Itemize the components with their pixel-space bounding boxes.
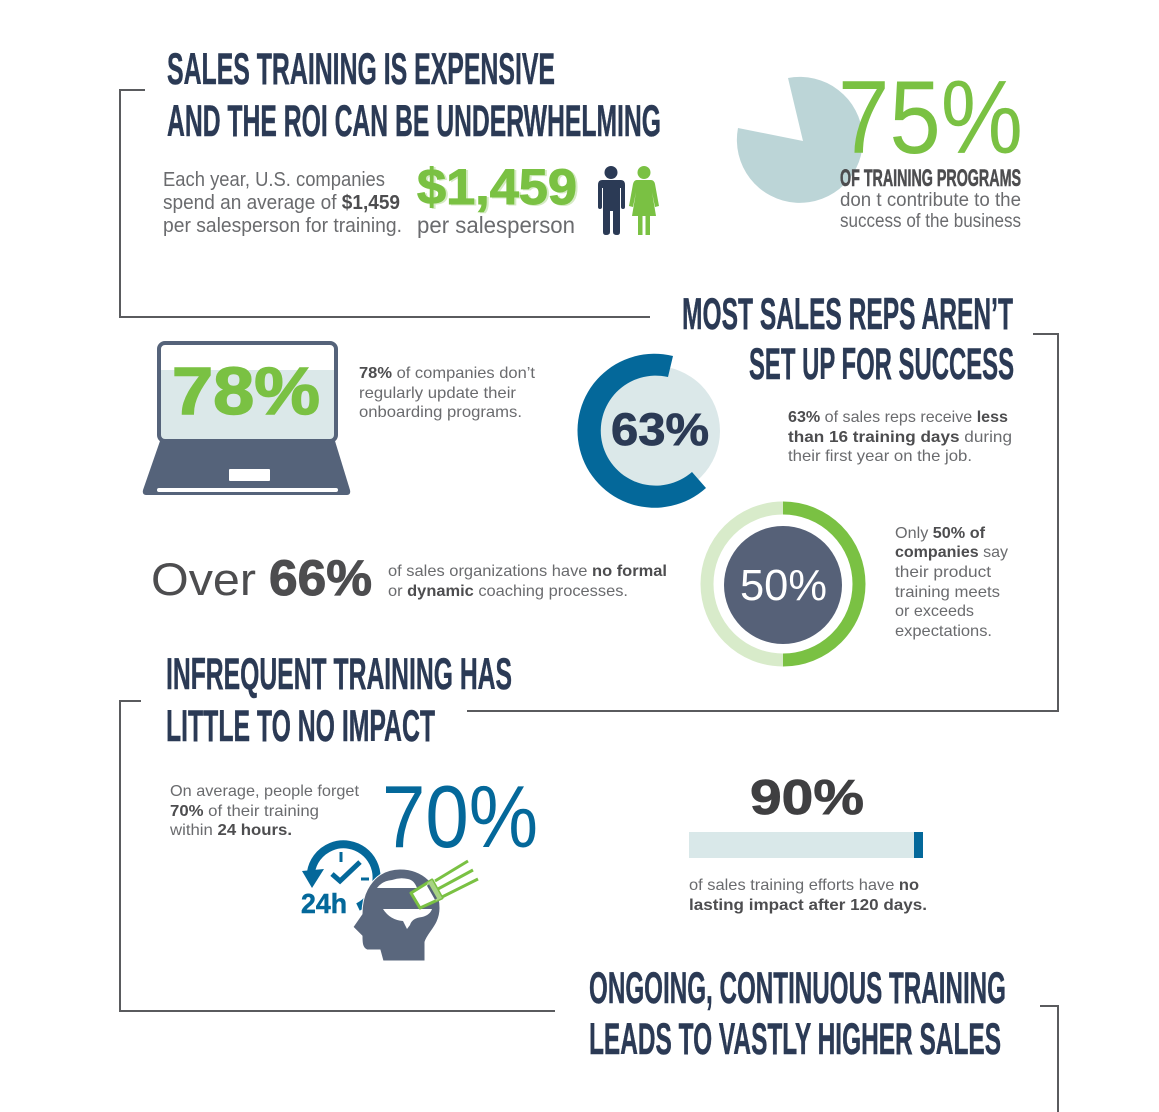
ring chart: 50%	[707, 508, 859, 660]
text block: product training: companies say	[895, 544, 1008, 561]
text block: product training: training meets	[895, 584, 1000, 601]
bar chart: 90%	[689, 771, 923, 858]
heading: ongoing continuous training	[589, 964, 1006, 1064]
text block: forget training: 70% of their training	[170, 803, 319, 820]
heading: infrequent training	[166, 650, 512, 751]
stat: over 66%	[151, 550, 372, 606]
text block: forget training: On average, people forget	[170, 783, 360, 800]
stat: 70%: 70%	[382, 767, 538, 866]
stat: $1,459 per salesperson: $1,459	[419, 160, 579, 216]
text block: forget training	[169, 783, 360, 839]
ring chart: 50%: 50%	[740, 561, 827, 610]
text block: 63% of sales reps: their first year on the job.	[788, 448, 972, 465]
heading: infrequent training: LITTLE TO NO IMPACT	[166, 702, 435, 751]
stat: 75% of training programs	[838, 60, 1023, 232]
text block: no lasting impact: of sales training efforts have no	[689, 877, 919, 894]
text block: no lasting impact: lasting impact after 120 days.	[689, 897, 927, 914]
stat: $1,459 per salesperson: per salesperson	[417, 212, 575, 238]
icon: man	[598, 166, 625, 235]
text block: annual spend: Each year, U.S. companies	[163, 169, 385, 191]
icon: laptop with 78%: 78%	[172, 354, 320, 429]
text block: product training: Only 50% of	[895, 525, 986, 542]
icon: laptop with 78%	[143, 343, 350, 495]
text block: coaching processes: or dynamic coaching processes.	[388, 583, 628, 600]
icon: woman	[629, 166, 659, 235]
text block: product training	[895, 525, 1008, 640]
icon: 24h clock: 24h	[301, 888, 347, 919]
stat: 75% of training programs: don t contribute to the	[840, 190, 1021, 211]
icon: 24h clock	[301, 844, 377, 919]
stat: over 66%: 66%	[269, 550, 372, 606]
text block: product training: or exceeds	[895, 603, 974, 620]
bar chart: 90%: 90%	[750, 771, 864, 825]
donut chart: 63%	[578, 354, 720, 508]
text block: coaching processes	[388, 563, 667, 600]
text block: 78% of companies	[359, 365, 536, 421]
icon: head with eraser	[353, 861, 478, 961]
text block: 78% of companies: onboarding programs.	[359, 404, 522, 421]
stat: over 66%: Over	[151, 554, 256, 605]
stat: 75% of training programs: 75%	[838, 60, 1023, 176]
text block: 78% of companies: regularly update their	[359, 385, 517, 402]
text block: no lasting impact	[689, 877, 927, 914]
text block: 78% of companies: 78% of companies don’t	[359, 365, 536, 382]
text block: product training: their product	[895, 564, 992, 581]
stat: 75% of training programs: success of the business	[840, 211, 1021, 232]
heading: most sales reps	[682, 290, 1014, 389]
heading: sales training is expensive: AND THE ROI CAN BE UNDERWHELMING	[167, 97, 661, 146]
text block: forget training: within 24 hours.	[169, 822, 292, 839]
text block: 63% of sales reps	[788, 409, 1012, 465]
heading: sales training is expensive: SALES TRAINING IS EXPENSIVE	[167, 45, 555, 94]
stat: $1,459 per salesperson	[417, 159, 579, 238]
donut chart: 63%: 63%	[611, 404, 709, 455]
text block: annual spend: per salesperson for training.	[163, 215, 402, 237]
text block: 63% of sales reps: 63% of sales reps receive less	[788, 409, 1008, 426]
text block: product training: expectations.	[895, 623, 992, 640]
stat: 75% of training programs: OF TRAINING PROGRAMS	[840, 165, 1021, 192]
text block: annual spend	[163, 169, 402, 237]
pie chart: 75%	[737, 77, 863, 203]
text block: coaching processes: of sales organizations have no formal	[388, 563, 667, 580]
text block: 63% of sales reps: than 16 training days during	[788, 429, 1012, 446]
text block: annual spend: spend an average of $1,459	[163, 192, 400, 214]
stat: $1,459 per salesperson: $1,459	[417, 159, 577, 215]
heading: sales training is expensive	[167, 45, 661, 146]
heading: infrequent training: INFREQUENT TRAINING HAS	[166, 650, 512, 699]
